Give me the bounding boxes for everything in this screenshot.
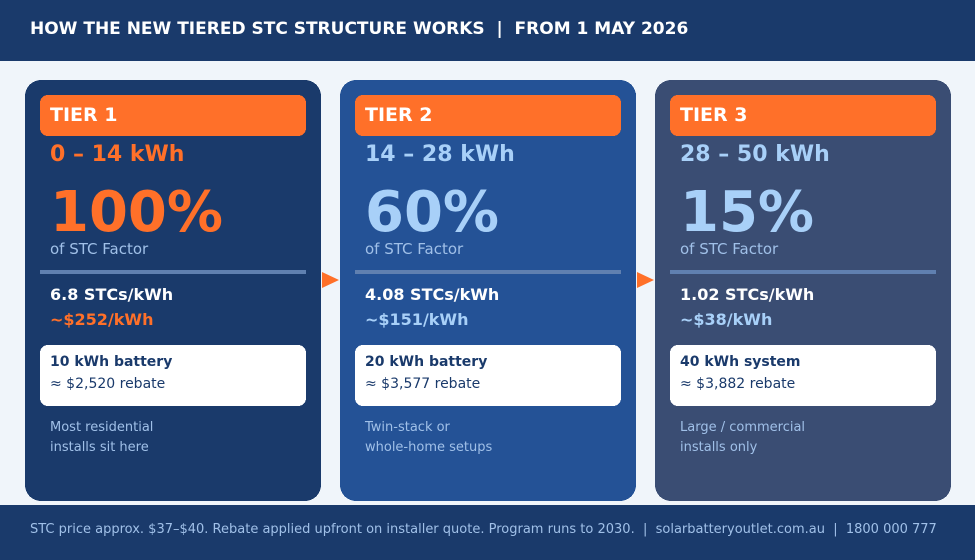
tier 1 note: installs sit here [50,440,149,455]
tier 3 percentage caption: of STC Factor [680,240,779,258]
tier 3 note [680,420,805,455]
tier 1 heading badge [40,95,306,136]
footer [0,505,975,560]
tier 1 note [50,420,153,455]
footer: STC price approx. $37–$40. Rebate applied upfront on installer quote. Program runs to 2030. | solarbatteryoutlet.com.au | 1800 000 777 [30,522,937,537]
tier 1 note: Most residential [50,420,153,435]
tier 1 percentage: 100% [50,180,223,245]
arrow: tier 1 to tier 2 [322,272,339,288]
tier 2 percentage caption: of STC Factor [365,240,464,258]
tier 1 example box [40,345,306,406]
tier 3 example box: 40 kWh system [680,354,801,370]
tier 2 note: Twin-stack or [364,420,451,435]
tier 2 example box: ≈ $3,577 rebate [365,376,480,392]
tier 2 dollar rate: ~$151/kWh [365,310,468,329]
tier 3 example box [670,345,936,406]
tier 3 note: installs only [680,440,758,455]
tier 1 range: 0 – 14 kWh [50,142,184,167]
header banner [0,0,975,61]
tier 3 note: Large / commercial [680,420,805,435]
tier 3 STC rate: 1.02 STCs/kWh [680,285,814,304]
tier 2 percentage: 60% [365,180,499,245]
tier 3 range: 28 – 50 kWh [680,142,830,167]
tier 1 heading badge: TIER 1 [50,104,117,126]
arrow: tier 2 to tier 3 [637,272,654,288]
tier 1 example box: ≈ $2,520 rebate [50,376,165,392]
tier 2 heading badge [355,95,621,136]
tier 3 heading badge: TIER 3 [680,104,747,126]
tier 3 example box: ≈ $3,882 rebate [680,376,795,392]
tier 2 STC rate: 4.08 STCs/kWh [365,285,499,304]
tier 1 example box: 10 kWh battery [50,354,172,370]
tier 2 note [364,420,492,455]
panel: tier 1 [25,80,321,501]
tier 2 heading badge: TIER 2 [365,104,432,126]
tier 2 example box [355,345,621,406]
tier 1 dollar rate: ~$252/kWh [50,310,153,329]
tier 2 example box: 20 kWh battery [365,354,487,370]
panel: tier 2 [340,80,636,501]
tier 3 heading badge [670,95,936,136]
tier 3 percentage: 15% [680,180,814,245]
tier 2 note: whole-home setups [365,440,492,455]
tier 3 dollar rate: ~$38/kWh [680,310,772,329]
title: HOW THE NEW TIERED STC STRUCTURE WORKS | FROM 1 MAY 2026 [30,19,688,39]
tier 1 percentage caption: of STC Factor [50,240,149,258]
tier 2 range: 14 – 28 kWh [365,142,515,167]
tier 1 STC rate: 6.8 STCs/kWh [50,285,173,304]
panel: tier 3 [655,80,951,501]
